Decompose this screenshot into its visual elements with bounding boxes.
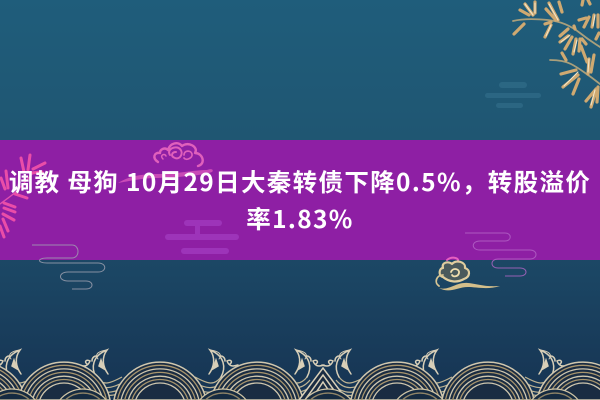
headline text: [9, 164, 591, 236]
icon: gold bamboo top right: [513, 0, 600, 107]
icon: gold cloud: [436, 258, 500, 290]
headline line 2: 率1.83%: [246, 201, 354, 236]
icon: faint cloud top right: [485, 82, 541, 108]
wave band: seigaiha waves: [0, 350, 600, 400]
icon: faint squiggle lower right of banner: [465, 233, 536, 276]
headline line 1: 调教 母狗 10月29日大秦转债下降0.5%，转股溢价: [9, 164, 591, 198]
panel: purple banner: [0, 140, 600, 260]
icon: grey squiggle lower left: [32, 245, 105, 289]
icon: pink cloud on banner: [118, 143, 213, 183]
icon: pink bamboo on banner: [0, 155, 45, 237]
icon: faint lavender cloud on banner: [165, 220, 239, 254]
